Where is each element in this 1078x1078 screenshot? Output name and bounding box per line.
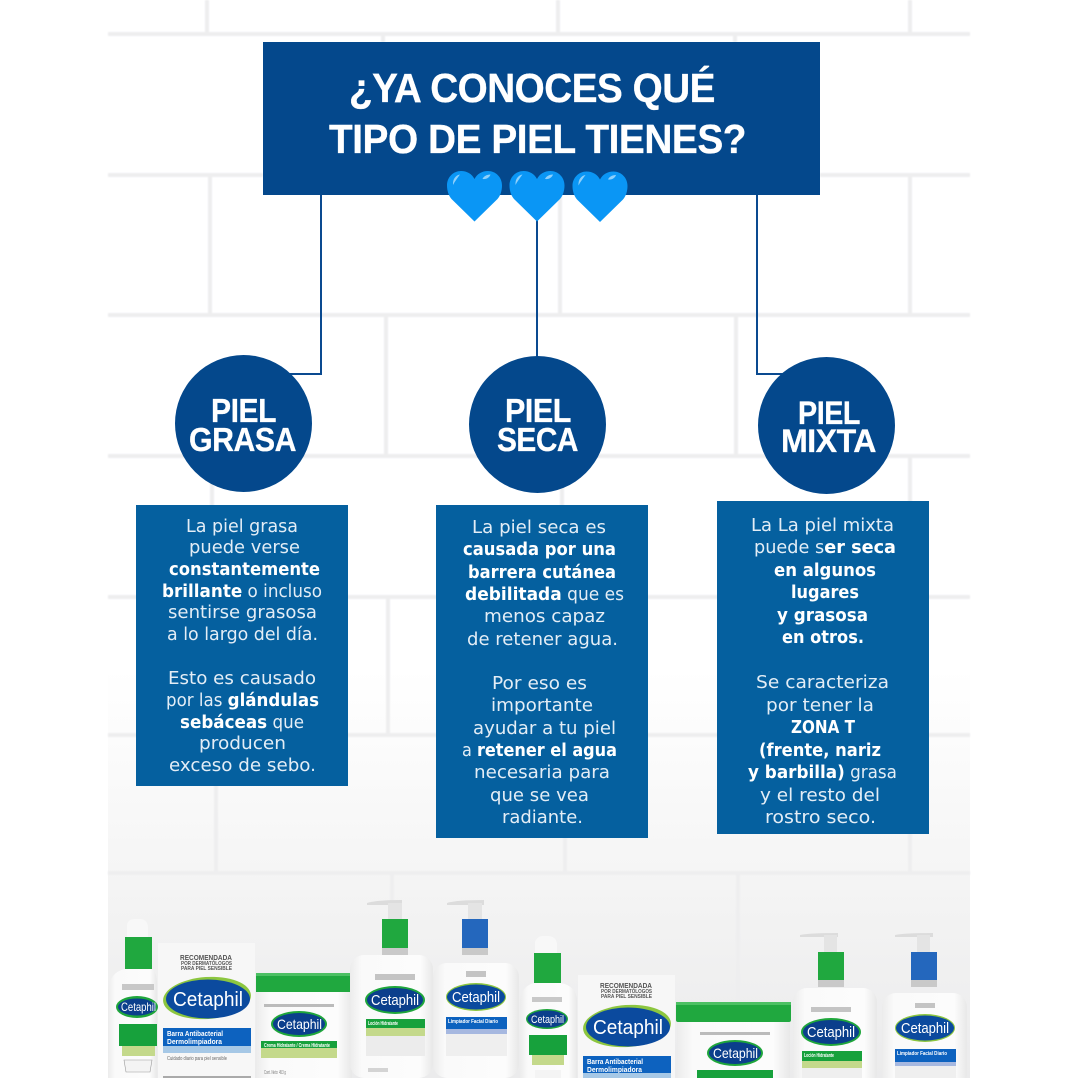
product: cleansing bar box 2: POR DERMATÓLOGOS [601,987,653,995]
product: pump bottle 2 blue: Limpiador Facial Diario [448,1019,498,1025]
product: pump bottle 3 green [793,933,877,1078]
panel: piel seca description: ayudar a tu piel [473,719,616,739]
panel: piel seca description: barrera cutánea [468,563,616,583]
panel: piel mixta description: lugares [791,583,859,603]
circle: piel mixta: MIXTA [781,423,876,459]
circle: piel seca [469,356,606,493]
product: pump bottle 4 blue [882,933,967,1078]
product: cleansing bar box 2: Barra Antibacterial [587,1059,643,1066]
product: cleansing bar box 1 [158,943,255,1078]
panel: piel mixta description: y grasosa [777,606,868,626]
product: pump bottle 2 blue [433,900,519,1078]
panel: piel mixta description: rostro seco. [765,808,876,828]
panel: piel seca description: menos capaz [484,607,605,627]
panel: piel seca description [436,505,648,838]
product: cleansing bar box 1: RECOMENDADA [180,955,232,962]
circle: piel mixta: PIEL [798,395,860,431]
circle: piel mixta [758,357,895,494]
product: pump bottle 4 blue: Limpiador Facial Diario [897,1051,947,1057]
product: pump bottle 1 green [350,900,433,1078]
panel: piel mixta description: y barbilla) grasa [748,763,897,783]
product: cream jar 1: Crema Hidratante / Crema Hidratante [264,1043,330,1049]
product: cream jar 2: Cetaphil [713,1045,758,1061]
panel: piel grasa description: brillante o incluso [162,582,322,602]
circle: piel grasa [175,355,312,492]
product: cleansing bar box 1: Cetaphil [173,989,243,1011]
panel: piel grasa description: por las glándulas [166,691,319,711]
product: small lotion bottle 1 [108,919,158,1078]
panel: piel seca description: La piel seca es [472,518,606,538]
product: pump bottle 3 green: Loción Hidratante [804,1053,834,1059]
panel: piel seca description: que se vea [490,786,589,806]
panel: piel grasa description: a lo largo del día. [167,625,318,645]
panel: piel grasa description: puede verse [189,538,300,558]
product: pump bottle 1 green: Cetaphil [371,992,419,1009]
icon: three blue hearts [447,171,628,222]
circle: piel grasa: PIEL [211,392,276,429]
panel: piel mixta description [717,501,929,834]
circle: piel seca: SECA [497,421,578,458]
panel: piel mixta description: ZONA T [791,718,855,738]
product: cleansing bar box 1: Barra Antibacterial [167,1031,223,1038]
product: cleansing bar box 1: Dermolimpiadora [167,1039,222,1046]
panel: piel grasa description [136,505,348,786]
product: cleansing bar box 2: Cetaphil [593,1017,663,1039]
product: small lotion bottle 1: Cetaphil [121,1000,156,1014]
panel: piel seca description: a retener el agua [462,741,617,761]
panel: piel seca description: importante [491,696,593,716]
panel: piel grasa description: sebáceas que [180,713,304,733]
circle: piel seca: PIEL [505,392,571,429]
product: pump bottle 1 green: Loción Hidratante [368,1021,398,1027]
panel: piel mixta description: y el resto del [760,786,880,806]
product: cream jar 2 [676,1002,791,1078]
product: cream jar 1: Cetaphil [277,1016,322,1032]
panel: piel mixta description: Se caracteriza [756,673,889,693]
panel: piel mixta description: puede ser seca [754,538,896,558]
title text [329,65,746,162]
panel: piel grasa description: exceso de sebo. [169,756,316,776]
panel: piel seca description: Por eso es [492,674,587,694]
product: cream jar 1 [256,973,354,1078]
panel: piel grasa description: producen [199,734,286,754]
panel: piel grasa description: constantemente [169,560,320,580]
product row [108,900,967,1078]
panel: piel grasa description: Esto es causado [168,669,316,689]
product: cleansing bar box 2: RECOMENDADA [600,983,652,990]
product: cleansing bar box 2: PARA PIEL SENSIBLE [601,994,653,1000]
product: pump bottle 2 blue: Cetaphil [452,989,500,1006]
title banner [263,42,820,195]
panel: piel mixta description: por tener la [766,696,874,716]
connector lines [285,195,790,374]
panel: piel mixta description: en algunos [774,561,876,581]
product: cleansing bar box 2 [578,975,675,1078]
panel: piel grasa description: La piel grasa [186,517,298,537]
panel: piel grasa description: sentirse grasosa [168,603,317,623]
product: cream jar 1: Cont. Neto: 453 g [264,1070,286,1076]
panel: piel mixta description: La La piel mixta [751,516,894,536]
product: pump bottle 3 green: Cetaphil [807,1024,855,1041]
product: cleansing bar box 1: Cuidado diario para piel sensible [167,1056,227,1062]
product: small lotion bottle 2 [520,936,577,1078]
product: cleansing bar box 2: Dermolimpiadora [587,1067,642,1074]
panel: piel seca description: de retener agua. [467,630,618,650]
product: small lotion bottle 2: Cetaphil [531,1014,564,1026]
panel: piel seca description: radiante. [502,808,583,828]
panel: piel seca description: necesaria para [474,763,610,783]
title text: ¿YA CONOCES QUÉ [349,65,715,111]
product: pump bottle 4 blue: Cetaphil [901,1020,949,1037]
panel: piel seca description: debilitada que es [465,585,624,605]
panel: piel mixta description: (frente, nariz [759,741,881,761]
title text: TIPO DE PIEL TIENES? [329,116,746,162]
panel: piel seca description: causada por una [463,540,616,560]
product: cleansing bar box 1: POR DERMATÓLOGOS [181,959,233,967]
circle: piel grasa: GRASA [189,421,296,458]
product: cleansing bar box 1: PARA PIEL SENSIBLE [181,966,233,972]
panel: piel mixta description: en otros. [782,628,864,648]
tiled wall background [108,0,970,1078]
